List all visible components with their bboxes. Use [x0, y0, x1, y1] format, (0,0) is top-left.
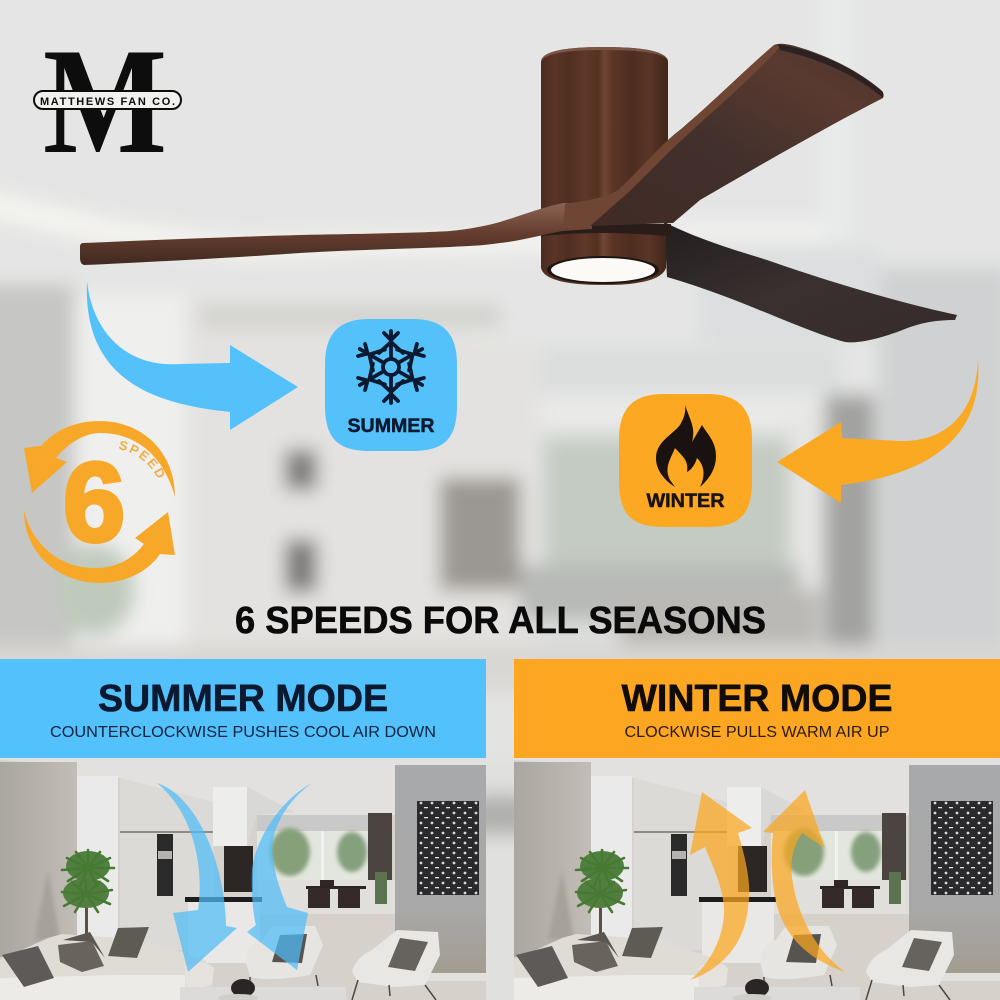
winter mode title: WINTER MODE	[622, 678, 892, 720]
logo: Matthews Fan Co.	[34, 17, 181, 185]
summer mode subtitle: COUNTERCLOCKWISE PUSHES COOL AIR DOWN	[50, 724, 436, 741]
lower circular arrow	[24, 510, 175, 583]
badge background	[325, 319, 457, 451]
logo name pill: MATTHEWS FAN CO.	[40, 96, 175, 108]
arrow: winter airflow	[777, 360, 978, 503]
arrow: summer airflow	[87, 281, 298, 430]
LED light	[547, 256, 659, 284]
LED light glow	[551, 258, 655, 282]
winter room photo	[514, 758, 1000, 1000]
winter header band	[514, 659, 1000, 758]
speed label	[119, 441, 164, 478]
icon: summer badge	[325, 319, 457, 451]
lower fan blade	[664, 222, 957, 342]
speed label: SPEED	[119, 441, 164, 478]
left down arrow	[157, 783, 237, 972]
summer airflow arrows	[157, 783, 312, 972]
blade shadow under hub	[541, 224, 671, 237]
left up arrow	[690, 792, 752, 980]
logo name pill	[34, 91, 181, 109]
badge background	[619, 394, 752, 527]
blade tip dark edge	[778, 44, 883, 98]
logo monogram M: M	[43, 17, 167, 185]
left fan blade	[80, 203, 592, 265]
right up arrow	[763, 790, 845, 972]
winter airflow arrows	[690, 790, 845, 980]
icon: winter badge	[619, 394, 752, 527]
summer header band	[0, 659, 486, 758]
icon: 6 speed badge	[24, 421, 175, 583]
right down arrow	[247, 783, 312, 970]
winter mode subtitle: CLOCKWISE PULLS WARM AIR UP	[624, 724, 890, 741]
summer room photo	[0, 758, 486, 1000]
summer label: SUMMER	[348, 416, 435, 437]
upper right fan blade	[567, 44, 884, 226]
icon: flame	[656, 405, 716, 487]
upper circular arrow	[24, 421, 175, 497]
winter label: WINTER	[646, 491, 725, 512]
ceiling fan	[80, 44, 957, 342]
summer mode title: SUMMER MODE	[98, 678, 388, 720]
fan motor housing	[541, 47, 668, 215]
blade edge highlight	[563, 45, 780, 229]
panel: summer mode	[0, 659, 486, 1000]
large number 6: 6	[63, 440, 125, 565]
light kit housing	[541, 233, 666, 285]
icon: snowflake	[354, 331, 428, 403]
panel: winter mode	[514, 659, 1000, 1000]
main heading: 6 SPEEDS FOR ALL SEASONS	[235, 600, 766, 642]
